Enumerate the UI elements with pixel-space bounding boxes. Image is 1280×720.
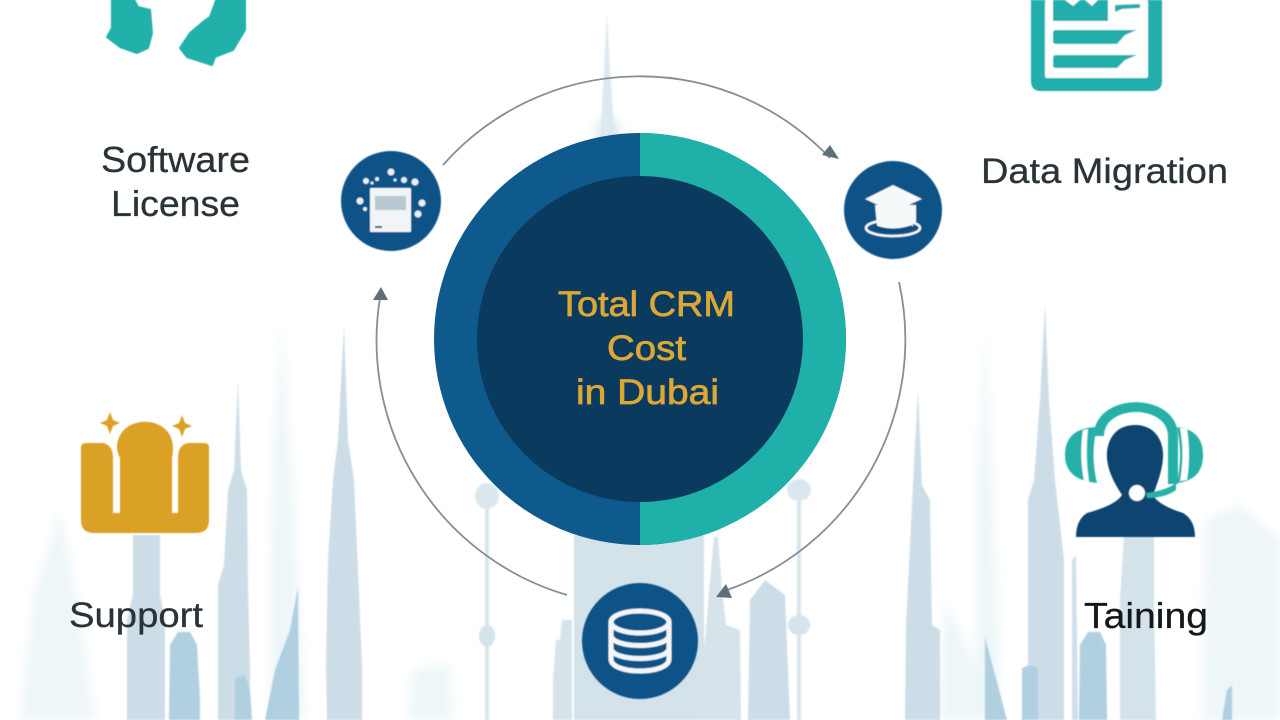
icon: database badge (582, 583, 698, 699)
centre towers (574, 535, 704, 720)
icon: cropped document top right (1031, 0, 1162, 91)
icon: graduation cap badge (844, 161, 942, 259)
central donut chart (434, 133, 846, 545)
label: support: Support (69, 596, 203, 635)
icon: software window badge (341, 151, 441, 251)
centre title: in Dubai (576, 373, 719, 412)
arrow: migration to database (right arc) (716, 282, 905, 598)
icon: gold support mosque (81, 412, 209, 533)
label: software license (101, 139, 250, 224)
centre title: Cost (607, 329, 686, 368)
label: software license: License (111, 183, 240, 224)
centre spire (600, 12, 615, 140)
poles (485, 500, 489, 720)
arrow: license to migration (top arc) (443, 76, 839, 165)
icon: training headset agent (1065, 402, 1203, 537)
blue foreground towers (169, 555, 1232, 720)
headband (1094, 402, 1178, 484)
left towers (127, 535, 165, 720)
icon: cropped teal handset top left (107, 0, 245, 65)
head and shoulders (1076, 425, 1195, 537)
right towers (905, 390, 940, 720)
label: data migration: Data Migration (981, 152, 1228, 191)
label: training: Taining (1084, 595, 1208, 636)
centre title (558, 285, 735, 412)
centre title: Total CRM (558, 285, 735, 324)
arrow: database to license (left arc) (373, 287, 567, 595)
label: software license: Software (101, 139, 250, 180)
